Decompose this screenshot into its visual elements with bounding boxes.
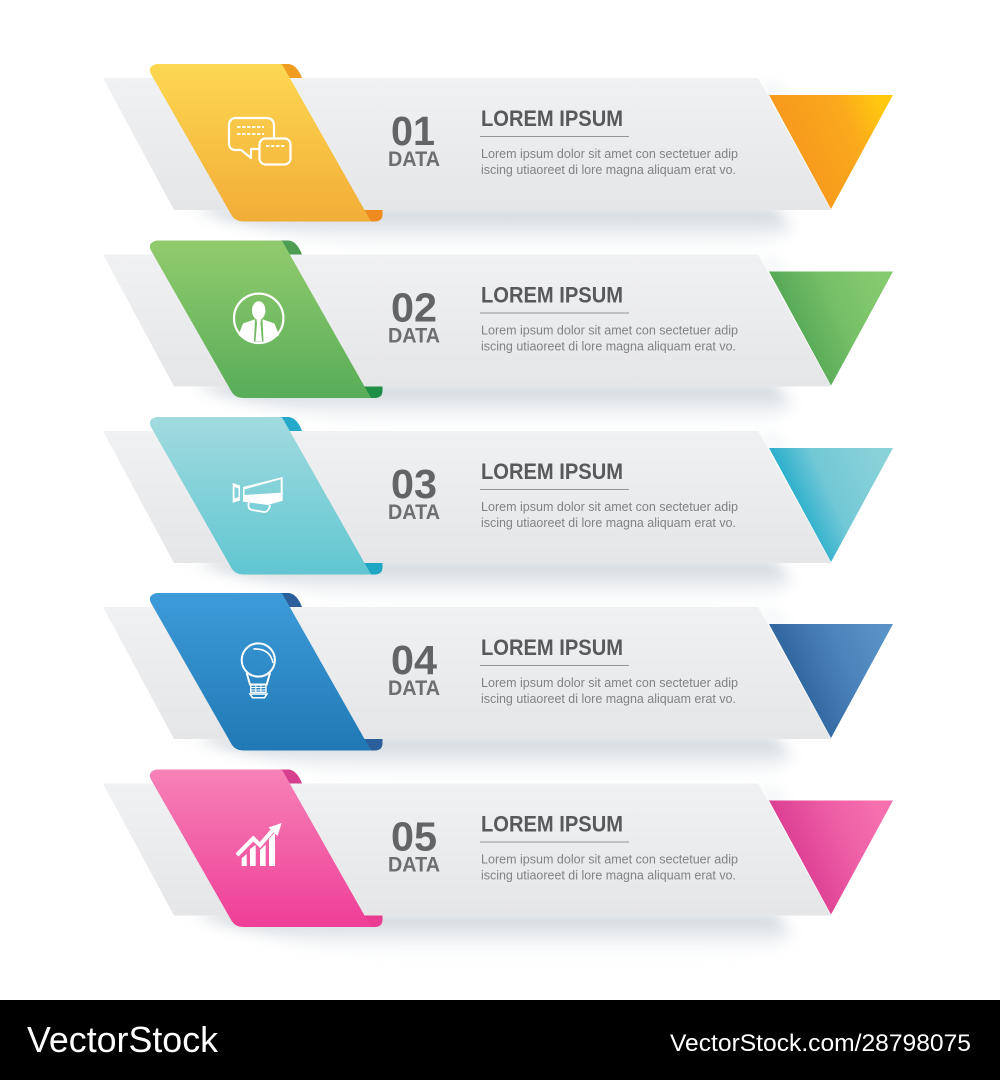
coloured ribbon <box>150 593 371 750</box>
data label: DATA <box>388 677 440 700</box>
panel: row 05 <box>103 770 893 958</box>
triangle <box>769 272 893 386</box>
triangle <box>769 448 893 562</box>
grey band <box>103 254 831 386</box>
number: 01 <box>391 108 435 154</box>
heading rule <box>480 489 629 490</box>
coloured ribbon <box>150 770 371 927</box>
heading: LOREM IPSUM <box>481 812 623 836</box>
coloured ribbon <box>150 240 371 398</box>
icon: light bulb <box>242 643 275 698</box>
body text: iscing utiaoreet di lore magna aliquam erat vo. <box>481 516 736 530</box>
grey band <box>103 607 831 739</box>
body text: Lorem ipsum dolor sit amet con sectetuer adip <box>481 852 738 866</box>
data label: DATA <box>388 148 440 171</box>
footer url: VectorStock.com/28798075 <box>670 1030 971 1057</box>
bottom fold of ribbon <box>364 386 382 398</box>
top fold of ribbon <box>279 593 302 607</box>
top fold of ribbon <box>279 770 302 784</box>
grey band <box>103 78 831 210</box>
tip shadow <box>760 786 790 800</box>
heading rule <box>480 665 629 666</box>
heading rule <box>480 312 629 314</box>
number: 03 <box>391 461 437 507</box>
panel: row 04 <box>103 593 893 781</box>
data label: DATA <box>388 501 440 524</box>
data label: DATA <box>388 324 440 348</box>
data label: DATA <box>388 854 440 876</box>
heading rule <box>480 136 629 137</box>
body text: iscing utiaoreet di lore magna aliquam erat vo. <box>481 868 736 882</box>
tip shadow <box>760 80 790 95</box>
heading: LOREM IPSUM <box>481 459 623 484</box>
number: 02 <box>391 284 437 330</box>
panel: row 01 <box>103 64 893 252</box>
body text: Lorem ipsum dolor sit amet con sectetuer adip <box>481 676 738 690</box>
footer brand: VectorStock <box>27 1019 219 1060</box>
triangle <box>769 95 893 209</box>
band shadow <box>195 208 792 252</box>
icon: megaphone <box>233 477 283 512</box>
tip shadow <box>760 256 790 272</box>
bottom fold of ribbon <box>364 916 382 927</box>
heading: LOREM IPSUM <box>481 635 623 660</box>
body text: Lorem ipsum dolor sit amet con sectetuer adip <box>481 500 738 514</box>
grey band <box>103 784 831 916</box>
panel: row 02 <box>103 240 893 428</box>
coloured ribbon <box>150 417 371 574</box>
heading rule <box>480 842 629 843</box>
body text: iscing utiaoreet di lore magna aliquam erat vo. <box>481 692 736 706</box>
top fold of ribbon <box>279 64 302 78</box>
top fold of ribbon <box>279 240 302 254</box>
body text: Lorem ipsum dolor sit amet con sectetuer adip <box>481 324 738 338</box>
triangle <box>769 800 893 914</box>
band shadow <box>195 561 792 605</box>
heading: LOREM IPSUM <box>481 106 623 131</box>
coloured ribbon <box>150 64 371 222</box>
bottom fold of ribbon <box>364 210 382 222</box>
band shadow <box>195 384 792 428</box>
body text: Lorem ipsum dolor sit amet con sectetuer adip <box>481 147 738 161</box>
top fold of ribbon <box>279 417 302 431</box>
panel: row 03 <box>103 417 893 605</box>
body text: iscing utiaoreet di lore magna aliquam erat vo. <box>481 163 736 177</box>
bottom fold of ribbon <box>364 563 382 574</box>
tip shadow <box>760 433 790 448</box>
icon: businessman <box>234 294 283 343</box>
bottom fold of ribbon <box>364 739 382 750</box>
heading: LOREM IPSUM <box>481 282 623 308</box>
number: 04 <box>391 637 437 683</box>
icon: chat bubbles <box>229 118 290 164</box>
icon: rising chart <box>237 823 282 866</box>
number: 05 <box>391 814 437 860</box>
footer bar <box>0 1000 1000 1080</box>
band shadow <box>195 914 792 958</box>
band shadow <box>195 737 792 781</box>
tip shadow <box>760 609 790 624</box>
triangle <box>769 624 893 738</box>
body text: iscing utiaoreet di lore magna aliquam erat vo. <box>481 340 736 354</box>
grey band <box>103 431 831 563</box>
